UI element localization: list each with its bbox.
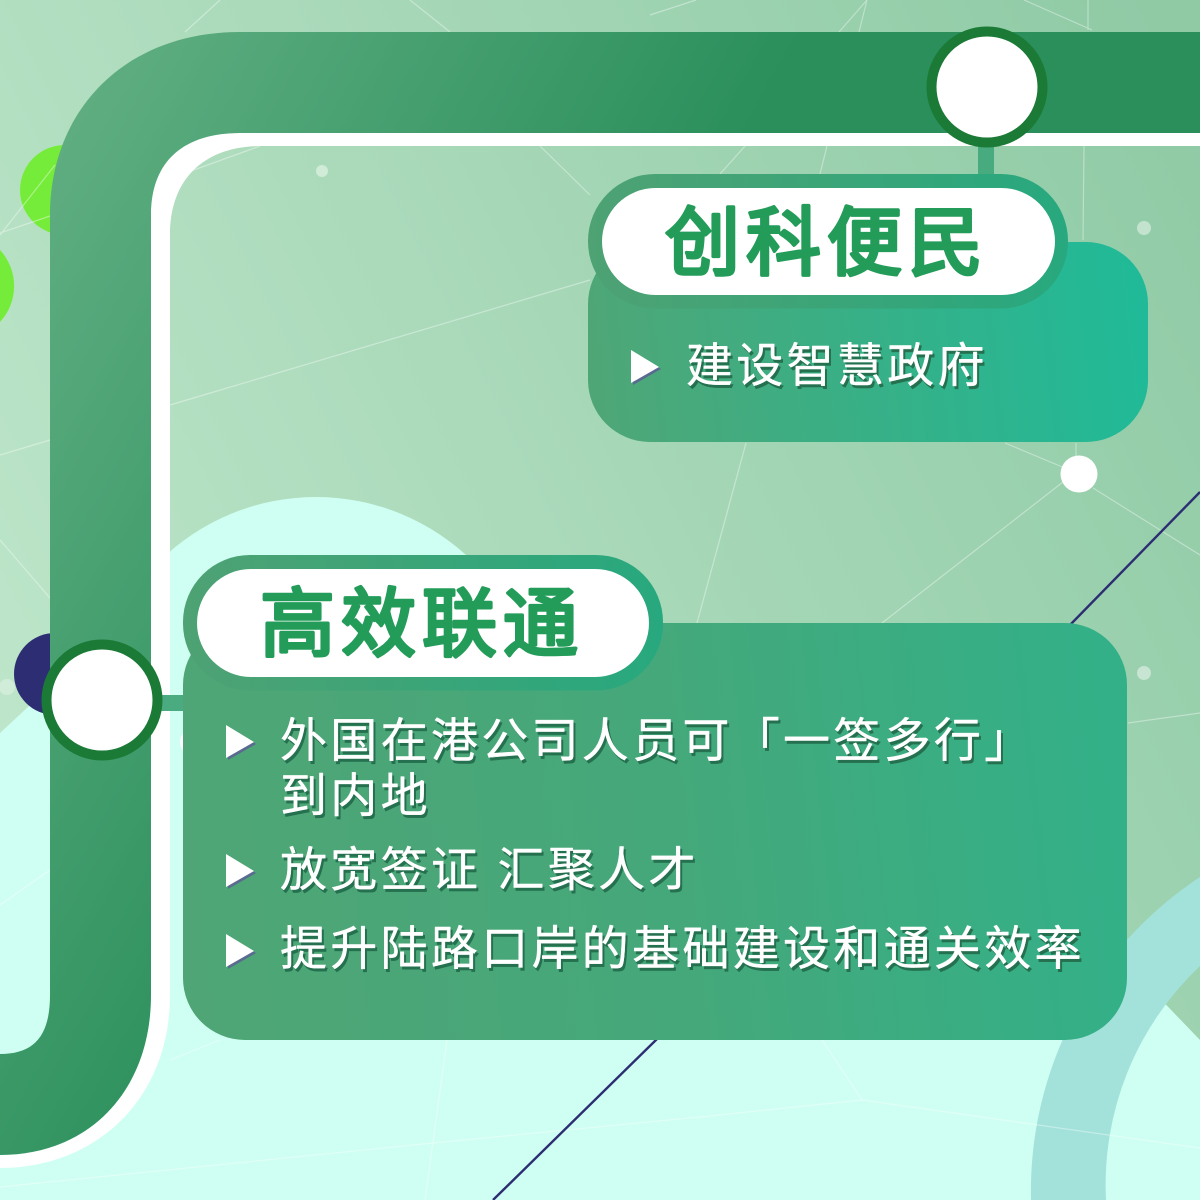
connector: top node to card [978, 140, 994, 185]
teal ring arc [1031, 877, 1200, 1200]
heading: 创科便民 [665, 201, 989, 285]
node: top station [932, 32, 1042, 142]
navy decorative circle [14, 633, 96, 715]
panel: 高效联通 [183, 555, 1127, 1040]
bullet arrow [631, 350, 661, 385]
card body [588, 242, 1148, 442]
heading: 高效联通 [260, 582, 584, 666]
bullet arrow 1 [226, 725, 256, 760]
decorative dots [0, 165, 1151, 757]
bullet text 1: 外国在港公司人员可「一签多行」 [280, 714, 1034, 767]
navy diagonal line [493, 492, 1200, 1200]
panel: 创科便民 [588, 174, 1148, 442]
bullet text 1 line 2: 到内地 [280, 769, 431, 822]
bullet arrow 3 [226, 934, 256, 969]
mint background shape [0, 497, 1200, 1200]
bullet text 2: 放宽签证 汇聚人才 [280, 843, 699, 896]
green decorative circles [0, 145, 110, 322]
bullet text: 建设智慧政府 [686, 339, 988, 392]
heading pill border [588, 174, 1068, 308]
heading pill border [183, 555, 663, 690]
heading pill [602, 188, 1055, 295]
connector: left node to card [155, 695, 190, 711]
bullet text 3: 提升陆路口岸的基础建设和通关效率 [280, 922, 1085, 975]
heading pill [197, 569, 649, 677]
node: left station [46, 644, 158, 756]
card body [183, 623, 1127, 1040]
bullet arrow 2 [226, 854, 256, 889]
